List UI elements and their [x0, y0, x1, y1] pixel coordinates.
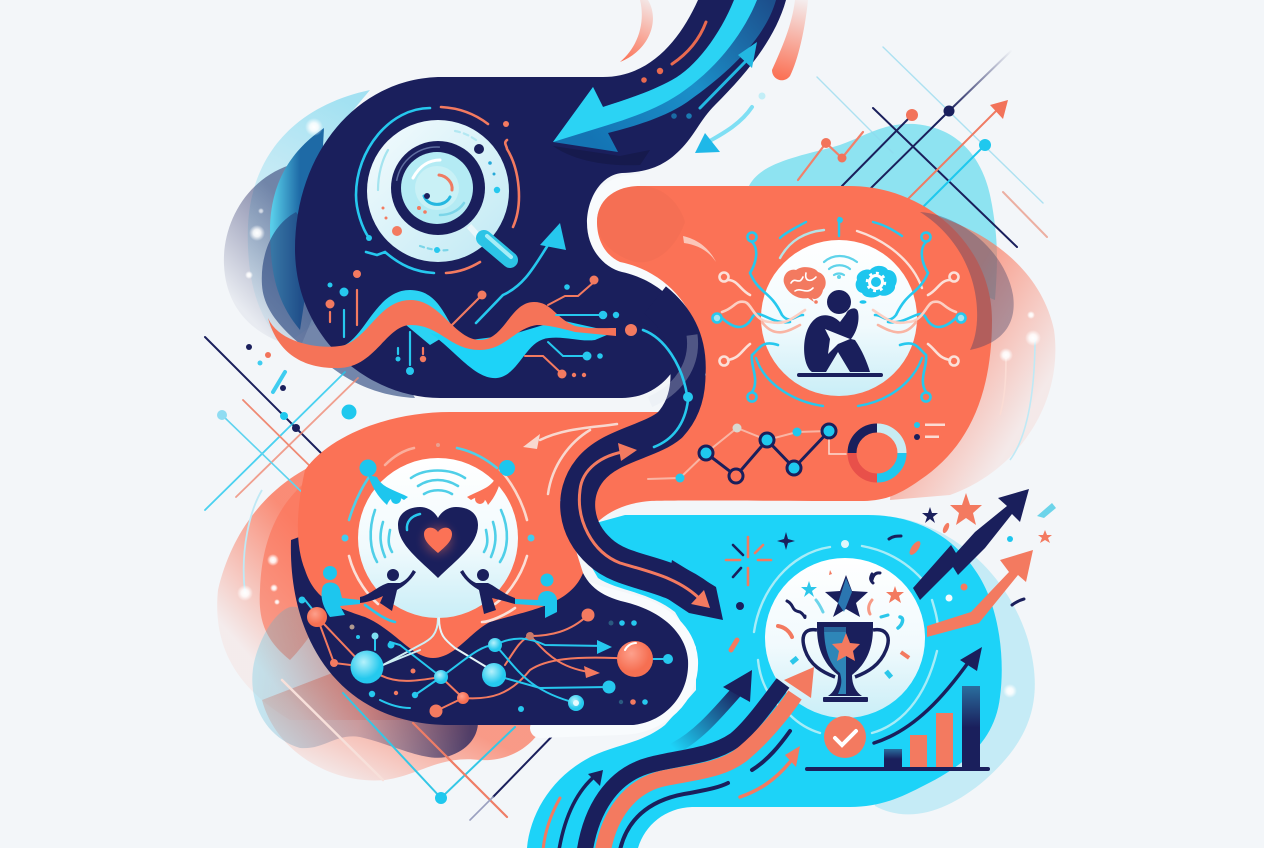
big stripe arrow [553, 0, 776, 152]
panel: navy top magnifier [295, 0, 786, 398]
lens marks [378, 131, 476, 250]
background blob: right orange fade [890, 210, 1055, 500]
wave: cyan and orange stream [268, 290, 616, 378]
panel: navy lower network [291, 500, 688, 728]
cyan backdrop blob [748, 124, 997, 300]
shadow under arrow [553, 146, 650, 165]
arrow end [665, 560, 723, 620]
heart icon [398, 507, 478, 578]
star icon [825, 575, 868, 617]
background lines: top right chart [748, 47, 1047, 300]
background blob: lower orange wash [262, 670, 545, 780]
background lines: left cross [205, 337, 358, 510]
small ribbon arrow [700, 62, 745, 108]
hands figures [322, 566, 557, 618]
bar chart with trend arrow [805, 647, 990, 771]
line chart [648, 424, 846, 483]
wifi icon [824, 256, 857, 279]
lens disc [367, 120, 509, 262]
background blob: blue band beside panel [270, 128, 324, 330]
arrow: cyan rising in navy panel [452, 223, 566, 325]
network graph [298, 596, 673, 718]
corner shade bubble [597, 186, 685, 262]
confetti and stars top right [922, 493, 1056, 698]
lower rising ribbons [543, 667, 814, 848]
rising orange arrow [927, 550, 1033, 637]
orange trail [579, 451, 702, 601]
right glow dots [999, 311, 1041, 460]
translucent overlap arc [650, 335, 693, 402]
trophy disc [754, 540, 938, 733]
rings [754, 546, 938, 733]
confetti [778, 573, 903, 637]
seated person icon [797, 290, 883, 377]
wave branches [525, 276, 637, 378]
celebration burst [726, 522, 951, 650]
background blob: top-left cyan crescent [248, 90, 370, 345]
soft outer halo [860, 518, 1035, 814]
person thinking disc [712, 217, 966, 406]
signal arcs [349, 448, 527, 622]
rising navy arrow [913, 489, 1029, 600]
disc [761, 240, 917, 396]
white separator halo [597, 186, 706, 375]
donut chart [852, 428, 902, 478]
background blob: bottom-left orange [217, 458, 440, 720]
arcs around magnifier [356, 107, 519, 273]
white return arrow [523, 424, 617, 494]
donut legend [914, 422, 945, 440]
trophy icon [803, 622, 888, 702]
decorative dots upper ribbon [641, 77, 647, 83]
gray overlap blob [920, 212, 1014, 350]
ribbon: connecting S navy [578, 300, 723, 620]
arrowheads [597, 640, 612, 654]
tendrils right [873, 232, 966, 402]
panel: cyan achievement [527, 515, 1035, 848]
background lines: bottom V [282, 680, 563, 820]
panel: orange heart [298, 412, 660, 658]
background blob: inner orange band [260, 465, 330, 660]
background blob: top-left gray [224, 165, 320, 348]
gear thought cloud icon [856, 266, 897, 304]
orange figure top right [467, 460, 515, 505]
nodes [298, 596, 673, 718]
arrow: cyan outside ribbon [695, 92, 766, 153]
background blob: dark overlap [262, 212, 415, 398]
check badge [824, 716, 866, 758]
arcs [756, 217, 922, 406]
cyan figure top left [360, 460, 408, 505]
tendrils left [712, 232, 805, 402]
left glow dots [237, 118, 323, 605]
cyan trail with nodes [643, 330, 687, 395]
top decorative orange streaks [620, 0, 808, 80]
heart disc [322, 443, 557, 668]
handle [469, 226, 478, 236]
small bar icons left of wave [326, 270, 426, 375]
magnifier icon [356, 107, 519, 273]
background blob: gray-cyan [252, 607, 478, 758]
root stems under disc [383, 618, 488, 668]
panel: orange thinking [590, 186, 1014, 530]
brain icon [784, 267, 826, 304]
